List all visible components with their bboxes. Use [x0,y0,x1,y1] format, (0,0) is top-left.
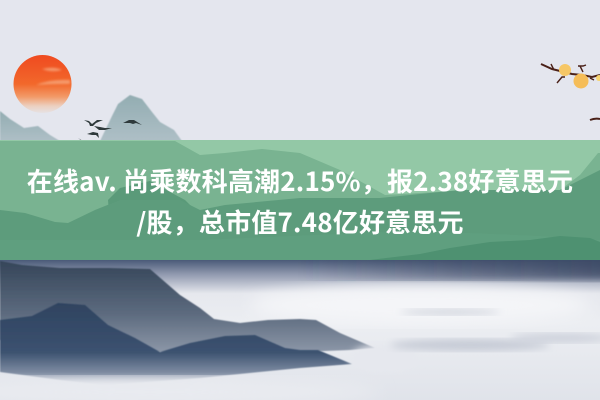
forested peak [108,181,200,225]
red sun [14,55,72,113]
title text: /股，总市值7.48亿好意思元 [136,203,464,240]
translucent green title band [0,140,600,260]
white cloud [250,285,590,325]
distant blue-grey mountains [0,95,182,141]
dark foreground ridge [370,236,600,260]
front dark ridge [0,303,352,385]
foreground mist [0,378,380,400]
mist over ridge tips [351,344,419,372]
rear dark ridge [0,261,375,352]
mid ridge [0,170,600,260]
dark horizon [300,256,600,280]
flock of birds [51,120,142,164]
plum blossom branches [541,64,600,120]
misty sea and dark mountains [0,256,600,400]
low ridge [0,232,600,260]
title text: 在线av. 尚乘数科高潮2.15%，报2.38好意思元 [27,162,573,199]
title text [27,162,573,240]
far ridge [0,141,600,260]
